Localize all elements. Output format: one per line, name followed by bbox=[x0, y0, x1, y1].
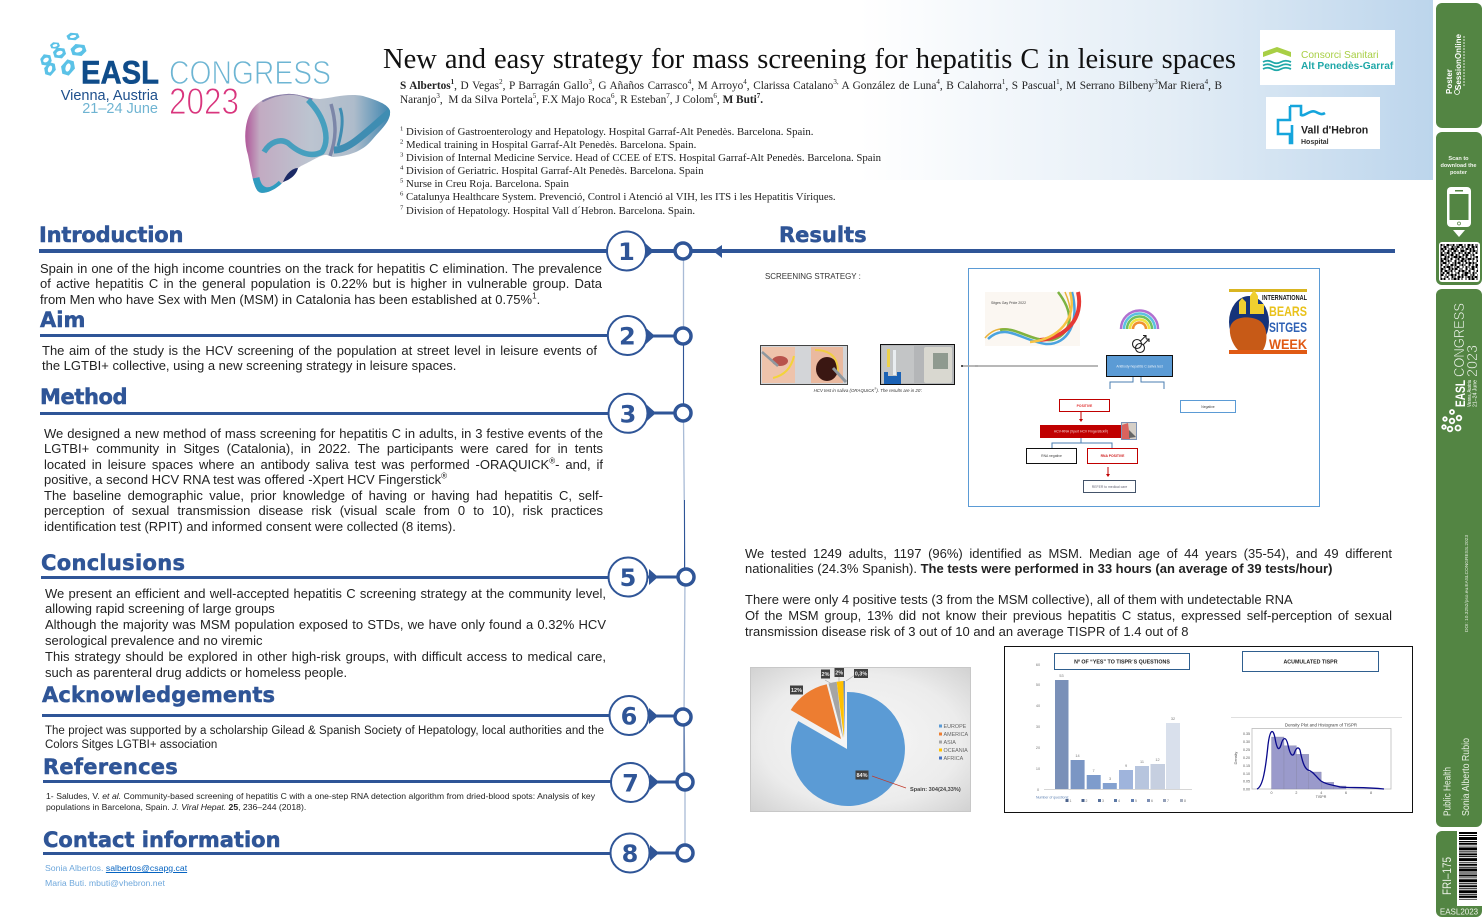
box: refer to medical care: REFER to medical care bbox=[1092, 485, 1127, 489]
EASL wordmark: EASL bbox=[81, 54, 159, 90]
arrow: results rule pointing to timeline bbox=[692, 245, 1395, 258]
logo: Consorci Sanitari Alt Penedès-Garraf bbox=[1260, 30, 1395, 85]
legend: EUROPE bbox=[944, 724, 967, 730]
affiliations: 5 Nurse in Creu Roja. Barcelona. Spain bbox=[400, 177, 569, 190]
bar chart legend: 5 bbox=[1135, 799, 1137, 803]
image: International Bears Sitges Week: SITGES bbox=[1269, 319, 1307, 335]
sidebar logo: 2023 bbox=[1464, 345, 1481, 377]
bar chart: yes answers per question: 3 bbox=[1109, 777, 1111, 781]
bar chart legend: 4 bbox=[1118, 799, 1120, 803]
marker 1 bbox=[607, 232, 691, 270]
legend: AFRICA bbox=[944, 756, 964, 762]
density plot: histogram of TISPR: 2 bbox=[1295, 791, 1297, 795]
bar chart: yes answers per question: 0 bbox=[1037, 788, 1039, 792]
bar chart: yes answers per question: 7 bbox=[1092, 769, 1095, 773]
panel: method bbox=[40, 385, 608, 534]
bar chart legend: 1 bbox=[1070, 799, 1072, 803]
pie chart: nationalities by continent bbox=[750, 667, 971, 812]
density plot: histogram of TISPR: Density bbox=[1234, 752, 1238, 764]
heading: accumulated TISPR: ACUMULATED TISPR bbox=[1283, 660, 1338, 666]
icon: phone bbox=[1447, 187, 1471, 227]
heading: Aim: Aim bbox=[40, 308, 85, 332]
bar chart: yes answers per question: 53 bbox=[1059, 674, 1064, 678]
panel: acknowledgements bbox=[42, 683, 609, 750]
marker 2 bbox=[608, 316, 691, 355]
affiliations: 7 Division of Hepatology. Hospital Vall d´Hebron. Barcelona. Spain. bbox=[400, 204, 695, 216]
panel: Poster Session Online: SessionOnline bbox=[1454, 33, 1463, 90]
box: RNA positive bbox=[1088, 448, 1138, 464]
bar chart: yes answers per question: 12 bbox=[1155, 758, 1160, 762]
affiliations: 1 Division of Gastroenterology and Hepatology. Hospital Garraf-Alt Penedès. Barcelona. Spain. bbox=[400, 125, 813, 138]
legend: AMERICA bbox=[944, 732, 968, 738]
image: Sitges Gay Pride swoosh bbox=[985, 292, 1080, 346]
data labels: 2% bbox=[822, 672, 830, 678]
density plot: histogram of TISPR: TISPR bbox=[1316, 795, 1327, 799]
panel: poster code and barcode: FRI–175 bbox=[1442, 857, 1454, 895]
density plot: histogram of TISPR: 0.20 bbox=[1243, 756, 1250, 760]
icon: EASL hexagon cluster bbox=[40, 33, 86, 78]
bar chart: yes answers per question: 11 bbox=[1140, 760, 1144, 764]
box: HCV RNA test bbox=[1040, 425, 1122, 438]
heading: number of yes answers bbox=[1054, 654, 1190, 670]
QR code bbox=[1439, 242, 1480, 282]
panel: Poster Session Online: Poster bbox=[1445, 69, 1454, 94]
marker 8: 8 bbox=[622, 840, 638, 868]
heading: Method: Method bbox=[40, 385, 127, 409]
photo: saliva swab bbox=[760, 345, 848, 385]
logo: Vall d'Hebron Hospital: Hospital bbox=[1301, 139, 1329, 146]
panel: TISPR charts bbox=[1004, 646, 1413, 813]
density plot: histogram of TISPR: 0.35 bbox=[1243, 732, 1250, 736]
marker 1: 1 bbox=[618, 238, 635, 266]
method text: LGTBI+ community in Sitges (Catalonia), in 2022. The participants were cared for in tents bbox=[44, 441, 603, 456]
heading: Contact information: Contact information bbox=[43, 828, 281, 852]
title: New and easy strategy for mass screening for hepatitis C in leisure spaces bbox=[383, 44, 1236, 75]
method text: The baseline demographic value, prior knowledge of having or having had hepatitis C, self- bbox=[44, 488, 603, 502]
slice: Europe 84% bbox=[791, 692, 905, 806]
heading: number of yes answers: Nº OF “YES” TO TISPR´S QUESTIONS bbox=[1074, 660, 1170, 666]
acknowledgements text: Colors Sitges LGTBI+ association bbox=[45, 738, 217, 750]
image: International Bears Sitges Week bbox=[1229, 289, 1308, 354]
authors: S Albertos1, D Vegas2, P Barragán Gallo3, G Añaños Carrasco4, M Arroyo4, Clarissa Catalano3, A González de Luna4, B Calahorra1, S Pascual1, M Serrano Bilbeny3Mar Riera4, B bbox=[400, 78, 1222, 92]
image: International Bears Sitges Week: WEEK bbox=[1269, 336, 1307, 352]
affiliations: 2 Medical training in Hospital Garraf-Alt Penedès. Barcelona. Spain. bbox=[400, 138, 696, 151]
arrow: RNA positive to referral bbox=[1106, 467, 1110, 477]
arrow: positive to RNA test bbox=[1079, 412, 1083, 422]
data labels: 0,3% bbox=[855, 672, 867, 678]
results text: Of the MSM group, 13% did not know their previous hepatitis C status, expressed self-perception of sexual bbox=[745, 608, 1392, 622]
logo: Consorci Sanitari Alt Penedès-Garraf: Consorci Sanitari bbox=[1301, 50, 1379, 61]
panel: screening flowchart bbox=[968, 268, 1320, 507]
reference citation: populations in Barcelona, Spain. J. Viral Hepat. 25, 236–244 (2018). bbox=[46, 802, 306, 812]
affiliations bbox=[400, 125, 881, 216]
photo: test device and timer bbox=[880, 344, 955, 385]
marker 3 bbox=[608, 394, 691, 433]
icon: down arrow bbox=[1453, 230, 1465, 237]
box: antibody test bbox=[1106, 356, 1172, 376]
aim text: The aim of the study is the HCV screening of the population at street level in leisure events of bbox=[42, 343, 597, 358]
results text: transmission disease risk of 3 out of 10 and an average TISPR of 1.4 out of 8 bbox=[745, 624, 1188, 638]
icon: male symbols bbox=[1132, 336, 1149, 352]
introduction text: from Men who have Sex with Men (MSM) in Catalonia has been established at 0.75%1. bbox=[40, 291, 540, 306]
scan caption: poster bbox=[1450, 170, 1468, 176]
results text: nationalities (24.3% Spanish). The tests were performed in 33 hours (an average of 39 tests/hour) bbox=[745, 560, 1332, 576]
logo: Vall d'Hebron Hospital: Vall d'Hebron bbox=[1301, 124, 1368, 136]
conclusions text: We present an efficient and well-accepted hepatitis C screening strategy at the community level, bbox=[45, 586, 606, 600]
bar chart legend: 6 bbox=[1151, 799, 1153, 803]
authors bbox=[400, 78, 1222, 106]
box: antibody test: Antibody-hepatitis C saliva test bbox=[1116, 364, 1163, 368]
data labels: 84% bbox=[856, 773, 868, 779]
box: HCV RNA test: HCV-RNA (Xpert HCV Fingerstick®) bbox=[1054, 430, 1108, 434]
affiliations: 4 Division of Geriatric. Hospital Garraf-Alt Penedès. Barcelona. Spain bbox=[400, 164, 703, 177]
heading: References: References bbox=[43, 755, 178, 779]
marker 5: 5 bbox=[620, 564, 636, 592]
method text: located in leisure spaces where an antibody saliva test was performed -ORAQUICK®- and, if bbox=[44, 456, 603, 472]
affiliations: 6 Catalunya Healthcare System. Prevenció, Control i Atenció al VIH, les ITS i les Hepatitis Víriques. bbox=[400, 190, 836, 203]
logo: Consorci Sanitari Alt Penedès-Garraf: Alt Penedès-Garraf bbox=[1301, 61, 1394, 72]
panel: scan to download bbox=[1436, 132, 1482, 285]
aim text: the LGTBI+ collective, using a new screening strategy in leisure spaces. bbox=[42, 358, 456, 373]
sidebar logo: CONGRESS bbox=[1451, 303, 1468, 377]
panel: poster code and barcode bbox=[1436, 831, 1482, 917]
callout: Spain: Spain: 304(24,33%) bbox=[910, 787, 961, 793]
legend: ASIA bbox=[944, 740, 956, 746]
bar chart: yes answers per question: 50 bbox=[1036, 683, 1040, 687]
scan caption: download the bbox=[1440, 163, 1477, 169]
panel: EASL Congress sidebar bbox=[1436, 289, 1482, 827]
heading: Introduction: Introduction bbox=[39, 223, 183, 247]
conclusions text: serological prevalence and no viremic bbox=[45, 632, 263, 648]
density plot: histogram of TISPR: 0.00 bbox=[1243, 788, 1250, 792]
box: RNA negative bbox=[1026, 448, 1076, 464]
density plot: histogram of TISPR: Density Plot and Histogram of TISPR bbox=[1285, 722, 1357, 728]
scan caption: Scan to bbox=[1448, 156, 1469, 162]
2023 wordmark: 2023 bbox=[169, 81, 239, 122]
sidebar: poster session panels bbox=[1436, 3, 1482, 917]
marker 2: 2 bbox=[619, 322, 636, 350]
aim text bbox=[42, 343, 597, 373]
panel: contact information bbox=[43, 828, 610, 888]
results text: We tested 1249 adults, 1197 (96%) identified as MSM. Median age of 44 years (35-54), and 49 different bbox=[745, 546, 1392, 560]
bar chart legend: 8 bbox=[1184, 799, 1186, 803]
heading: Conclusions: Conclusions bbox=[41, 551, 185, 575]
results text: There were only 4 positive tests (3 from the MSM collective), all of them with undetectable RNA bbox=[745, 592, 1293, 607]
data labels: 2% bbox=[835, 670, 843, 676]
image: International Bears Sitges Week: INTERNATIONAL bbox=[1262, 295, 1308, 302]
bar chart: yes answers per question: 60 bbox=[1036, 663, 1040, 667]
bar chart: yes answers per question: 30 bbox=[1036, 725, 1040, 729]
heading: accumulated TISPR bbox=[1242, 652, 1378, 672]
density plot: histogram of TISPR: 0.30 bbox=[1243, 740, 1250, 744]
arrow: flowchart pointer into saliva test photos bbox=[961, 365, 978, 367]
bar chart legend: Number of questions: bbox=[1036, 796, 1069, 800]
sidebar logo: EASL bbox=[1452, 380, 1468, 407]
density plot: histogram of TISPR: 0.25 bbox=[1243, 748, 1250, 752]
data labels: 12% bbox=[791, 688, 802, 694]
legend bbox=[939, 724, 968, 762]
Vienna, Austria: Vienna, Austria bbox=[61, 88, 159, 104]
logo: Vall d'Hebron Hospital bbox=[1266, 97, 1380, 149]
conclusions text: such as parenteral drug addicts or homeless people. bbox=[45, 664, 347, 680]
bar chart legend bbox=[1036, 796, 1186, 803]
method text: We designed a new method of mass screening for hepatitis C in adults, in 3 festive events of the bbox=[44, 426, 603, 440]
density plot: histogram of TISPR: 0.05 bbox=[1243, 780, 1250, 784]
timeline with numbered section markers bbox=[606, 230, 696, 874]
bar chart: yes answers per question: 14 bbox=[1075, 754, 1080, 758]
density plot: histogram of TISPR: 8 bbox=[1370, 791, 1372, 795]
contact details: Sonia Albertos. salbertos@csapg.cat bbox=[45, 863, 187, 873]
label: screening strategy: SCREENING STRATEGY : bbox=[765, 272, 861, 281]
icon: rainbow bbox=[1121, 311, 1158, 329]
heading: Acknowledgements: Acknowledgements bbox=[42, 683, 275, 707]
introduction text: Spain in one of the high income countries on the track for hepatitis C elimination. The prevalence bbox=[40, 260, 602, 276]
conclusions text: This strategy should be explored in other high-risk groups, with difficult access to medical care, bbox=[45, 648, 606, 664]
panel: EASL Congress sidebar: Sonia Alberto Rubio bbox=[1461, 738, 1472, 816]
caption: saliva test: HCV test in saliva (ORAQUICK®). The results are in 20'. bbox=[814, 388, 922, 393]
reference citation bbox=[46, 791, 595, 812]
marker 5 bbox=[608, 558, 694, 596]
density plot: histogram of TISPR: 6 bbox=[1345, 791, 1347, 795]
density plot: histogram of TISPR: 0 bbox=[1270, 791, 1272, 795]
authors: Naranjo3, M da Silva Portela5, F.X Majo Roca6, R Esteban7, J Colom6, M Buti7. bbox=[400, 92, 763, 106]
bar chart: yes answers per question bbox=[1036, 663, 1192, 803]
box: positive: POSITIVE bbox=[1077, 404, 1093, 408]
bar chart legend: 3 bbox=[1102, 799, 1104, 803]
icon: liver illustration bbox=[245, 94, 390, 193]
image: International Bears Sitges Week: BEARS bbox=[1269, 303, 1307, 319]
acknowledgements text bbox=[45, 724, 604, 750]
marker 6: 6 bbox=[621, 702, 637, 730]
scan caption bbox=[1440, 156, 1477, 176]
slice: America 12% bbox=[791, 684, 841, 739]
EASL Congress logo bbox=[40, 32, 331, 122]
bar chart: yes answers per question: 20 bbox=[1036, 746, 1040, 750]
topic and author: Public Health bbox=[1442, 767, 1454, 816]
bar chart legend: 2 bbox=[1086, 799, 1088, 803]
contact details bbox=[45, 863, 188, 888]
acknowledgements text: The project was supported by a scholarship Gilead & Spanish Society of Hepatology, local authorities and the bbox=[45, 724, 604, 736]
panel: Poster Session Online bbox=[1436, 3, 1482, 128]
density plot: histogram of TISPR: 4 bbox=[1320, 791, 1322, 795]
bar chart legend: 7 bbox=[1167, 799, 1169, 803]
bar chart: yes answers per question: 40 bbox=[1036, 704, 1040, 708]
marker 6 bbox=[610, 696, 691, 735]
arrow: antibody test to saliva photos (extends left of panel) bbox=[975, 365, 1098, 367]
conclusions text bbox=[45, 586, 606, 680]
affiliations: 3 Division of Internal Medicine Service. Head of CCEE of ETS. Hospital Garraf-Alt Penedès. Barcelona. Spain bbox=[400, 151, 881, 164]
box: negative bbox=[1180, 400, 1236, 412]
reference citation: 1- Saludes, V. et al. Community-based screening of hepatitis C with a one-step RNA detection algorithm from dried-blood spots: Analysis of key bbox=[46, 791, 595, 801]
method text: perception of sexual transmission disease risk (visual scale from 0 to 10), risk practices bbox=[44, 503, 603, 518]
conclusions text: allowing rapid screening of large groups bbox=[45, 601, 275, 616]
slice: Oceania 2% bbox=[837, 681, 844, 738]
density plot: histogram of TISPR: 0.15 bbox=[1243, 764, 1250, 768]
marker 3: 3 bbox=[620, 400, 636, 428]
panel: poster code and barcode: EASL2023 bbox=[1440, 908, 1479, 916]
image: Sitges Gay Pride swoosh: Sitges Gay Pride 2022 bbox=[991, 301, 1026, 305]
marker 7 bbox=[611, 763, 693, 802]
method text bbox=[44, 426, 603, 534]
marker 7: 7 bbox=[622, 770, 639, 798]
conclusions text: Although the majority was MSM population exposed to STDs, we have only found a 0.32% HCV bbox=[45, 616, 606, 632]
slice: Asia 2% bbox=[828, 682, 843, 738]
heading: Results: Results bbox=[779, 223, 867, 247]
marker 8 bbox=[610, 834, 693, 872]
panel: references bbox=[43, 755, 610, 812]
box: positive bbox=[1060, 400, 1110, 412]
callout: Spain bbox=[872, 776, 961, 793]
bar chart: yes answers per question: 32 bbox=[1171, 717, 1175, 721]
contact details: Maria Buti. mbuti@vhebron.net bbox=[45, 878, 165, 888]
box: refer to medical care bbox=[1084, 480, 1136, 492]
panel: introduction bbox=[39, 223, 606, 306]
data labels bbox=[790, 668, 868, 780]
legend: OCEANIA bbox=[944, 748, 968, 754]
density plot: histogram of TISPR bbox=[1231, 718, 1402, 799]
panel: aim bbox=[40, 308, 607, 373]
sidebar logo bbox=[1442, 303, 1481, 431]
panel: conclusions bbox=[41, 551, 608, 680]
method text: identification test (RPIT) and informed consent were collected (8 items). bbox=[44, 518, 456, 534]
bar chart: yes answers per question: 10 bbox=[1036, 767, 1040, 771]
density plot: histogram of TISPR: 0.10 bbox=[1243, 772, 1250, 776]
results text bbox=[745, 546, 1392, 638]
method text: positive, a second HCV RNA test was offered -Xpert HCV Fingerstick® bbox=[44, 472, 447, 487]
sidebar logo: Vienna, Austria bbox=[1467, 379, 1473, 407]
photo: fingerstick thumbnail bbox=[1122, 422, 1136, 440]
DOI: DOI: 10.3252/pso.eu.EASLCONGRESS.2023 bbox=[1464, 535, 1470, 632]
slice: Africa 0.3% bbox=[844, 681, 845, 738]
bar chart: yes answers per question: 9 bbox=[1125, 764, 1127, 768]
sidebar logo: 21–24 June bbox=[1472, 380, 1478, 407]
introduction text bbox=[40, 260, 602, 306]
21–24 June: 21–24 June bbox=[82, 101, 158, 117]
box: negative: Negative bbox=[1201, 405, 1215, 409]
header background band bbox=[0, 0, 1433, 180]
box: RNA negative: RNA negative bbox=[1041, 454, 1062, 458]
CONGRESS wordmark: CONGRESS bbox=[169, 55, 331, 92]
introduction text: of active hepatitis C in the general population is 0.22% but is higher in vulnerable group. Data bbox=[40, 276, 602, 291]
box: RNA positive: RNA POSITIVE bbox=[1101, 454, 1125, 458]
